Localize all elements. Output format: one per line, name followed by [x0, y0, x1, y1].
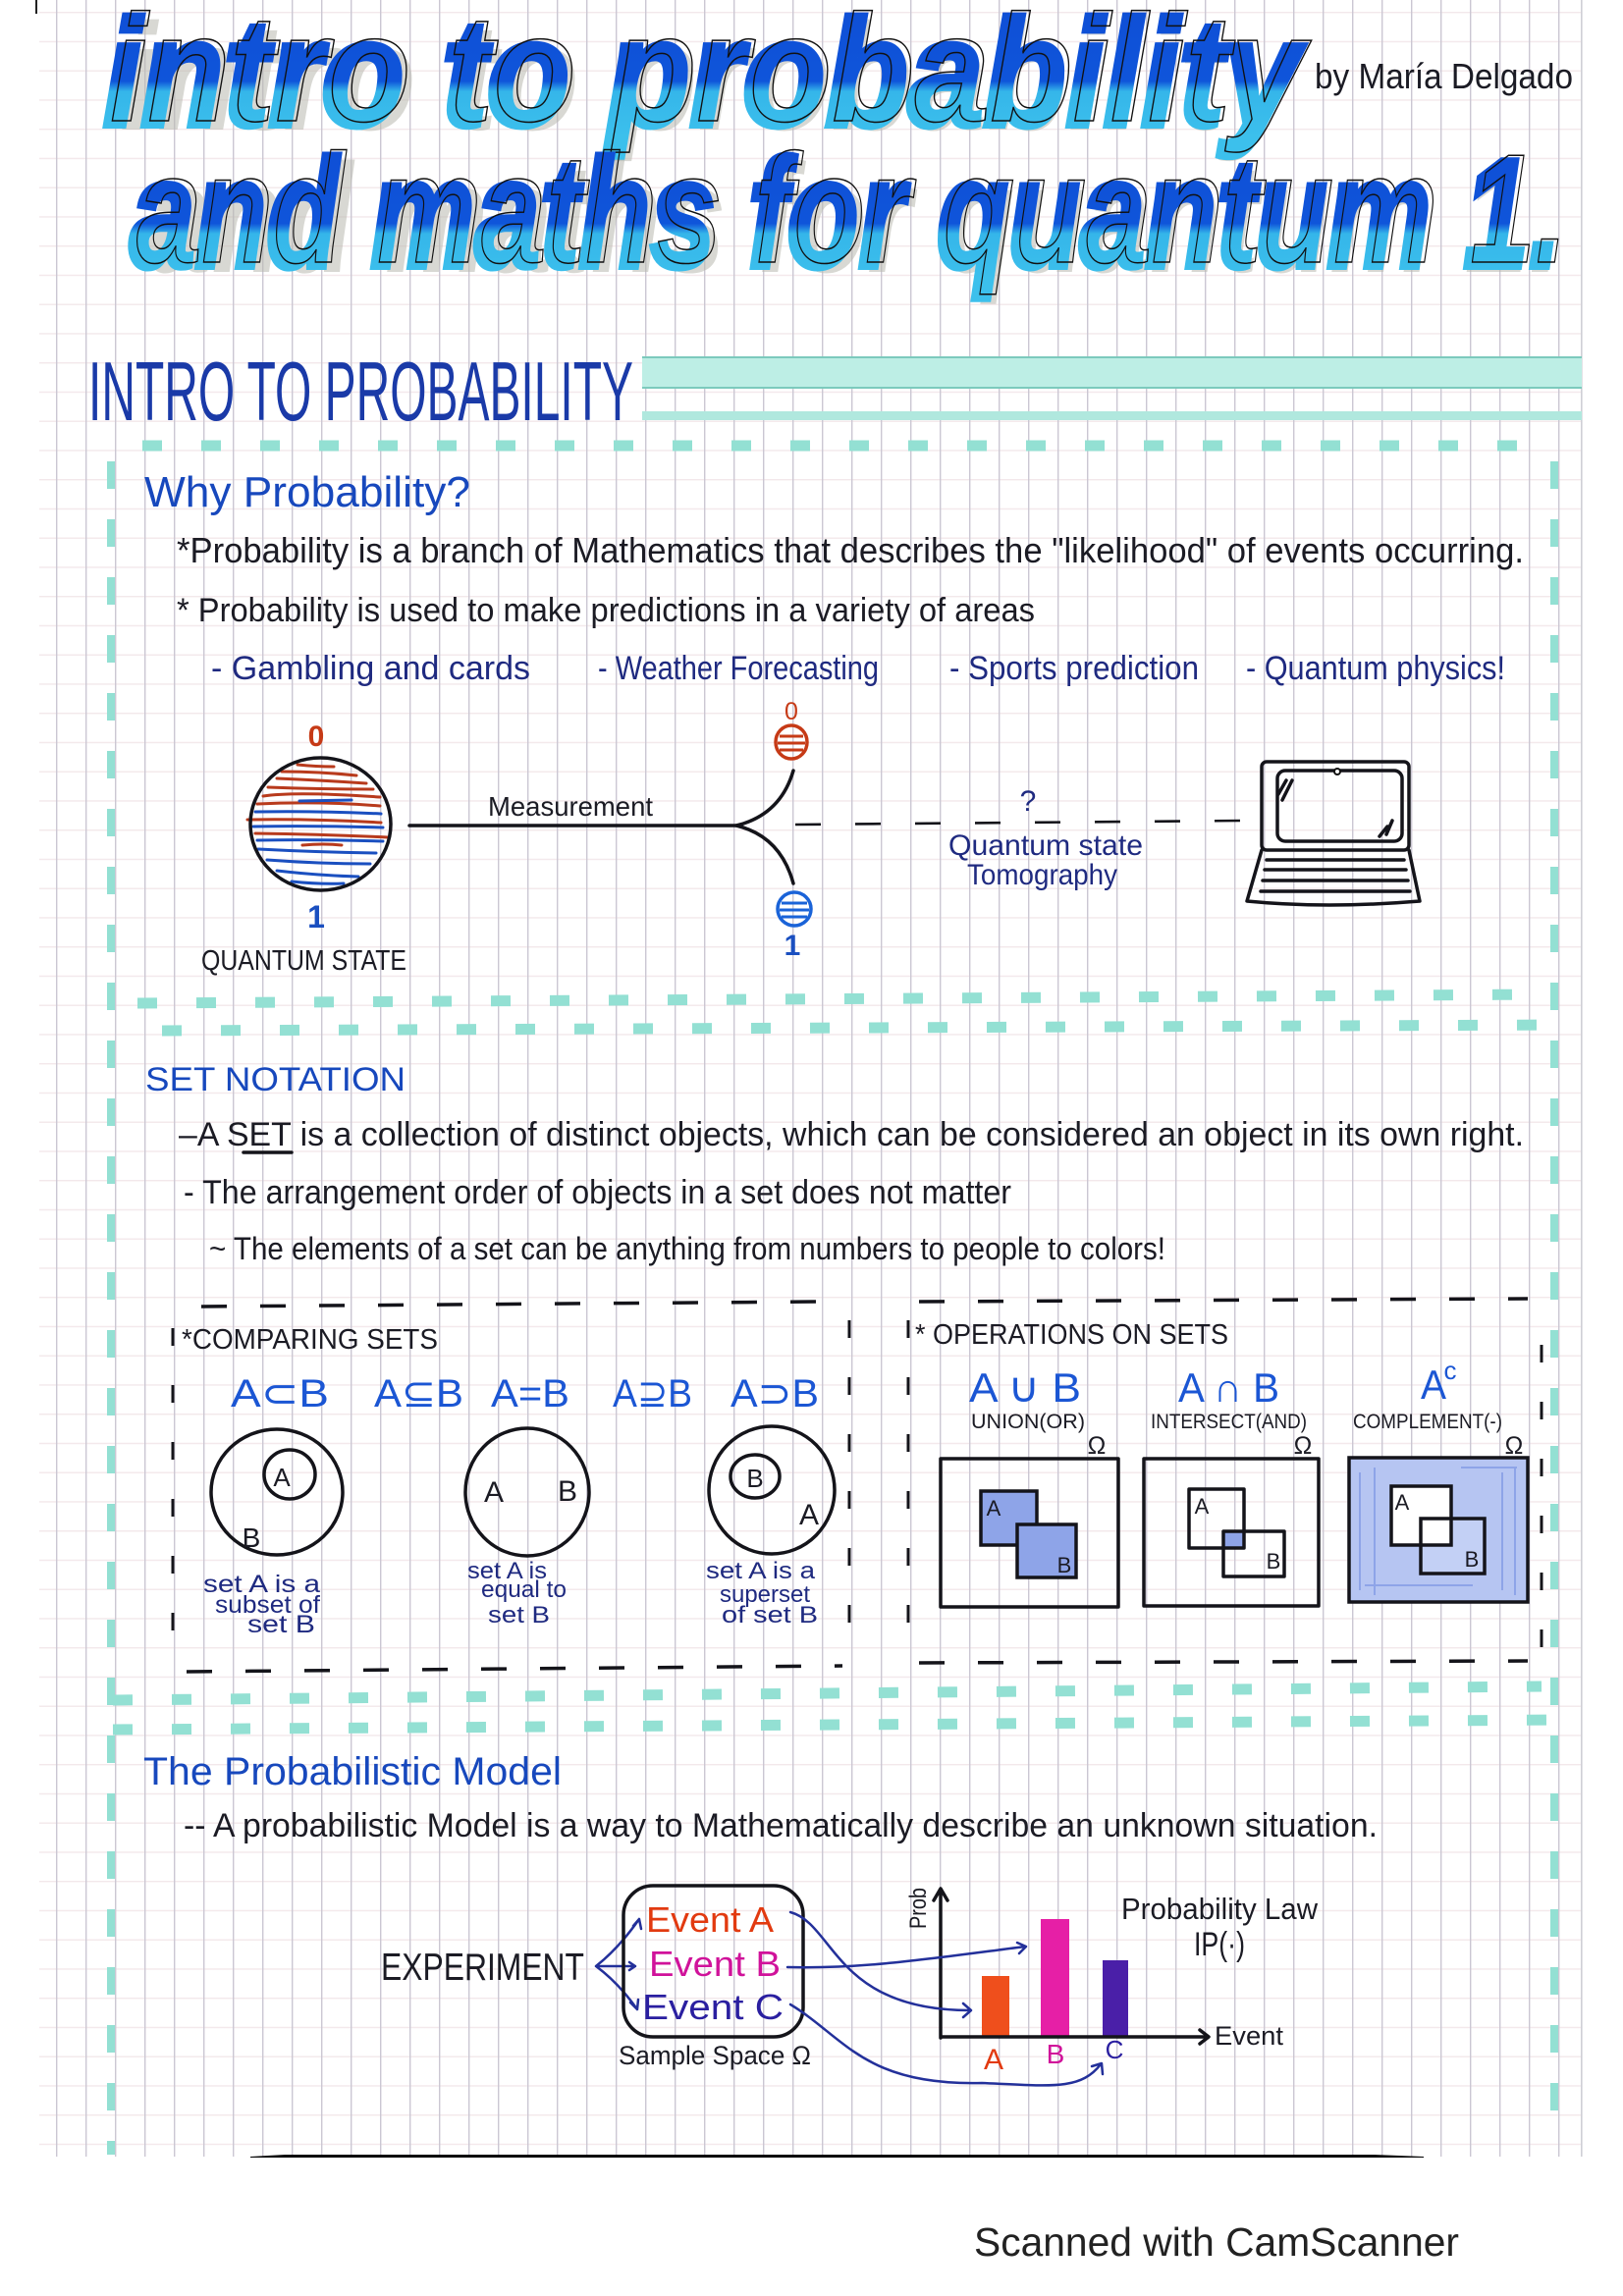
teal dashed section borders: [111, 446, 1571, 2155]
sample space box: Sample Space Ω: [619, 2041, 811, 2070]
venn: equal: B: [558, 1475, 577, 1508]
bar chart: probability law: Event: [1215, 2021, 1284, 2051]
heading: operations on sets: * OPERATIONS ON SETS: [915, 1319, 1228, 1351]
set relations notation: A⊇B: [613, 1372, 692, 1415]
text: set definition: –A SET is a collection of distinct objects, which can be considered an object in its own right.: [179, 1116, 1524, 1153]
arrows: events to chart: [787, 1912, 1103, 2085]
union: A ∪ B: [969, 1364, 1081, 1411]
set relations notation: A⊆B: [374, 1372, 463, 1415]
venn: subset: B: [243, 1522, 260, 1553]
heading: probabilistic model: The Probabilistic Model: [143, 1750, 562, 1793]
list: areas: - Weather Forecasting: [598, 650, 879, 687]
text: elements: ~ The elements of a set can be anything from numbers to people to colors!: [209, 1231, 1165, 1266]
measurement line and fork: Measurement: [488, 791, 653, 822]
bar chart: probability law: C: [1106, 2035, 1123, 2064]
panel: operations on sets: [908, 1299, 1542, 1663]
footer: scanner watermark: Scanned with CamScanner: [974, 2219, 1459, 2265]
union: [941, 1364, 1118, 1607]
icon: quantum state sphere: 0: [308, 721, 324, 753]
complement: COMPLEMENT(-): [1353, 1411, 1502, 1433]
sample space box: Event A: [646, 1899, 774, 1940]
icon: quantum state sphere: 1: [307, 899, 325, 934]
text: definition: *Probability is a branch of Mathematics that describes the "likelihood" of events occurring.: [177, 530, 1524, 570]
complement: [1349, 1356, 1528, 1602]
panel: why probability: [144, 468, 1524, 687]
venn: subset: [203, 1429, 343, 1638]
heading: why probability: Why Probability?: [144, 468, 470, 516]
union: A: [987, 1496, 1001, 1521]
text: order: - The arrangement order of objects in a set does not matter: [184, 1174, 1011, 1211]
intersection: INTERSECT(AND): [1151, 1411, 1307, 1433]
intersection: A ∩ B: [1178, 1364, 1279, 1411]
venn: superset: A: [799, 1499, 819, 1531]
venn: equal: [465, 1428, 589, 1629]
icon: outcome 0: [776, 698, 807, 759]
set relations notation: A=B: [491, 1372, 569, 1415]
complement: c: [1443, 1356, 1457, 1385]
list: areas: - Sports prediction: [949, 650, 1199, 687]
set relations notation: A⊂B: [231, 1372, 329, 1415]
author credit: by María Delgado: [1315, 56, 1573, 96]
bar chart: probability law: [905, 1888, 1319, 2076]
venn: superset: [706, 1426, 835, 1629]
text: uses: * Probability is used to make predictions in a variety of areas: [177, 592, 1035, 629]
icon: outcome 1: [778, 892, 811, 962]
venn: superset: set A is a: [706, 1558, 816, 1584]
heading: set notation: SET NOTATION: [145, 1061, 406, 1098]
bar chart: probability law: B: [1047, 2039, 1064, 2069]
section heading: intro to probability: INTRO TO PROBABILITY: [88, 346, 633, 439]
set relations notation: A⊃B: [730, 1372, 819, 1415]
panel: comparing sets: [173, 1302, 849, 1672]
complement: Ω: [1505, 1432, 1523, 1460]
tomography dashed link: ?: [1020, 785, 1036, 818]
list: areas: - Quantum physics!: [1246, 650, 1505, 687]
intersection: [1144, 1364, 1319, 1606]
icon: quantum state sphere: QUANTUM STATE: [201, 945, 406, 977]
panel: the probabilistic model: [143, 1750, 1378, 2085]
tomography dashed link: Tomography: [967, 859, 1117, 891]
icon: laptop: [1247, 762, 1420, 905]
union: B: [1057, 1553, 1071, 1577]
intersection: Ω: [1294, 1432, 1312, 1460]
tomography dashed link: Quantum state: [948, 829, 1143, 862]
label: experiment: EXPERIMENT: [381, 1947, 584, 1989]
bar chart: probability law: Prob: [905, 1888, 932, 1929]
title: [103, 0, 1568, 305]
venn: equal: set A is: [467, 1558, 547, 1584]
venn: subset: A: [273, 1463, 291, 1492]
sample space box: [619, 1886, 811, 2070]
venn: superset: superset: [720, 1581, 810, 1608]
text: model definition: -- A probabilistic Model is a way to Mathematically describe an unknown situation.: [184, 1807, 1378, 1844]
venn: equal: equal to: [481, 1576, 567, 1603]
panel: set notation: [145, 1061, 1524, 1266]
venn: equal: A: [484, 1476, 504, 1509]
venn: subset: set A is a: [203, 1571, 320, 1598]
heading: comparing sets: *COMPARING SETS: [182, 1324, 438, 1356]
union: UNION(OR): [971, 1411, 1085, 1433]
icon: quantum state sphere: [201, 721, 406, 977]
tomography dashed link: [795, 785, 1241, 891]
complement: A: [1421, 1362, 1446, 1408]
list: areas: - Gambling and cards: [211, 650, 530, 687]
union: Ω: [1088, 1432, 1106, 1460]
complement: A: [1395, 1490, 1410, 1515]
set relations notation: [231, 1372, 819, 1415]
complement: B: [1465, 1547, 1479, 1572]
bar chart: probability law: Probability Law: [1121, 1892, 1319, 1926]
sample space box: Event C: [642, 1987, 784, 2027]
diagram: measurement of quantum state: [201, 698, 1420, 977]
section heading: intro to probability: [88, 346, 1582, 439]
venn: superset: B: [746, 1464, 764, 1493]
intersection: B: [1267, 1549, 1280, 1574]
arrows: experiment to events: [596, 1919, 641, 2009]
list: areas: [211, 650, 1505, 687]
venn: subset: subset of: [215, 1591, 320, 1619]
sample space box: Event B: [649, 1944, 781, 1984]
bottom page edge: [250, 2155, 1424, 2158]
bar chart: probability law: IP(·): [1194, 1926, 1245, 1963]
intersection: A: [1195, 1494, 1210, 1519]
icon: outcome 1: 1: [784, 930, 800, 962]
bar chart: probability law: A: [984, 2044, 1003, 2076]
venn: subset: set B: [247, 1611, 315, 1638]
venn: superset: of set B: [722, 1602, 818, 1629]
measurement line and fork: [409, 771, 793, 883]
icon: outcome 0: 0: [784, 698, 798, 725]
venn: equal: set B: [488, 1602, 550, 1629]
